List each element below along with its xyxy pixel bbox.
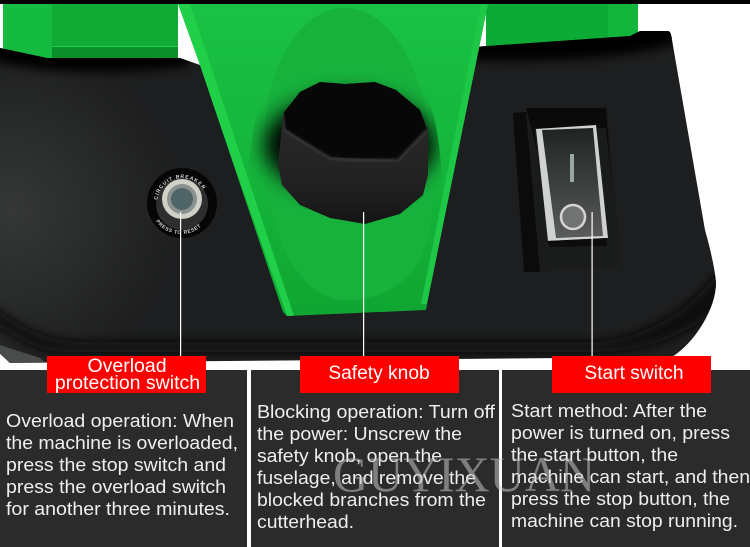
panel: blocking operation: safety knob, open the — [257, 445, 442, 466]
panel: overload operation — [0, 370, 247, 547]
panel: overload operation: Overload operation: When — [6, 410, 234, 431]
panel: blocking operation: the power: Unscrew the — [257, 423, 462, 444]
panel: overload operation: for another three minutes. — [6, 498, 230, 519]
panel: start method: machine can start, and then — [511, 466, 750, 487]
panel: blocking operation: Blocking operation: Turn off — [257, 401, 496, 422]
panel: blocking operation: cutterhead. — [257, 511, 354, 532]
panel: start method: Start method: After the — [511, 400, 707, 421]
panel: start method: the start button, the — [511, 444, 678, 465]
panel: blocking operation: blocked branches from the — [257, 489, 486, 510]
panel: green centre housing — [170, 0, 500, 320]
icon: start switch — [513, 107, 621, 272]
panel: start method: machine can stop running. — [511, 510, 738, 531]
label: overload protection switch: Overload — [87, 355, 167, 377]
label: safety knob: Safety knob — [328, 363, 430, 384]
leader line: start switch — [592, 212, 593, 357]
right green block — [486, 4, 638, 48]
panel: blocking operation — [251, 370, 499, 547]
label: overload protection switch — [47, 355, 206, 394]
label: start switch — [552, 356, 711, 393]
label: start switch: Start switch — [584, 363, 684, 384]
panel: blocking operation: fuselage, and remove the — [257, 467, 476, 488]
panel: black base — [0, 31, 716, 363]
label: safety knob — [300, 356, 459, 393]
left green block — [3, 4, 178, 66]
icon: overload breaker: CIRCUIT BREAKER — [154, 174, 206, 200]
leader line: overload switch — [180, 212, 181, 357]
panel: overload operation: the machine is overloaded, — [6, 432, 238, 453]
icon: safety knob — [278, 82, 428, 224]
icon: overload breaker: PRESS TO RESET — [156, 219, 200, 234]
panel: start method — [502, 370, 750, 547]
icon: overload breaker — [147, 168, 217, 238]
panel: start method: press the stop button, the — [511, 488, 730, 509]
machine photo — [0, 0, 750, 363]
panel: overload operation: press the overload switch — [6, 476, 226, 497]
panel: overload operation: press the stop switch and — [6, 454, 226, 475]
label: overload protection switch: protection switch — [55, 372, 200, 394]
leader line: safety knob — [363, 212, 364, 357]
panel: start method: power is turned on, press — [511, 422, 730, 443]
watermark: GUYIXUAN — [333, 446, 595, 502]
